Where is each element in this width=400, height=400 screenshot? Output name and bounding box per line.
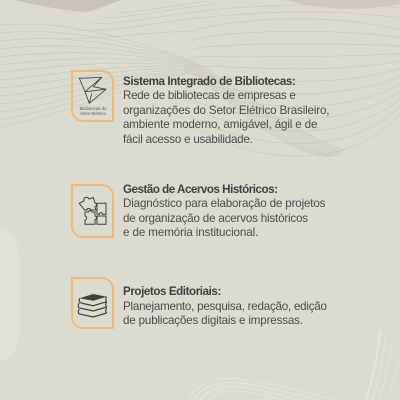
icon: puzzle pieces [71, 184, 114, 238]
text block: Projetos Editoriais: de publicações digitais e impressas. [123, 314, 303, 327]
bottom right pale waves [188, 330, 400, 400]
text block: Gestão de Acervos Históricos: e de memória institucional. [123, 226, 258, 239]
text block: Sistema Integrado de Bibliotecas: fácil acesso e usabilidade. [123, 133, 253, 146]
text block: Gestão de Acervos Históricos [123, 182, 325, 239]
text block: Sistema Integrado de Bibliotecas [123, 74, 329, 146]
icon: stack of books [71, 277, 114, 329]
icon: Bibliotecas do Setor Elétrico logo: Setor Elétrico [80, 111, 107, 116]
text block: Sistema Integrado de Bibliotecas: ambiente moderno, amigável, ágil e de [123, 118, 317, 131]
text block: Projetos Editoriais: Projetos Editoriais: [123, 285, 221, 298]
text block: Sistema Integrado de Bibliotecas: Rede de bibliotecas de empresas e [123, 89, 296, 102]
icon: Bibliotecas do Setor Elétrico logo [71, 70, 114, 122]
icon: Bibliotecas do Setor Elétrico logo: Bibliotecas do [80, 106, 107, 111]
text block: Gestão de Acervos Históricos: Gestão de Acervos Históricos: [123, 182, 277, 196]
lower left pale rounded shape [0, 228, 20, 360]
text block: Gestão de Acervos Históricos: Diagnóstico para elaboração de projetos [123, 197, 325, 210]
text block: Sistema Integrado de Bibliotecas: Sistema Integrado de Bibliotecas: [123, 74, 295, 88]
text block: Gestão de Acervos Históricos: de organização de acervos históricos [123, 212, 308, 225]
text block: Sistema Integrado de Bibliotecas: organizações do Setor Elétrico Brasileiro, [123, 104, 329, 117]
text block: Projetos Editoriais [123, 285, 327, 327]
text block: Projetos Editoriais: Planejamento, pesquisa, redação, edição [123, 300, 327, 313]
